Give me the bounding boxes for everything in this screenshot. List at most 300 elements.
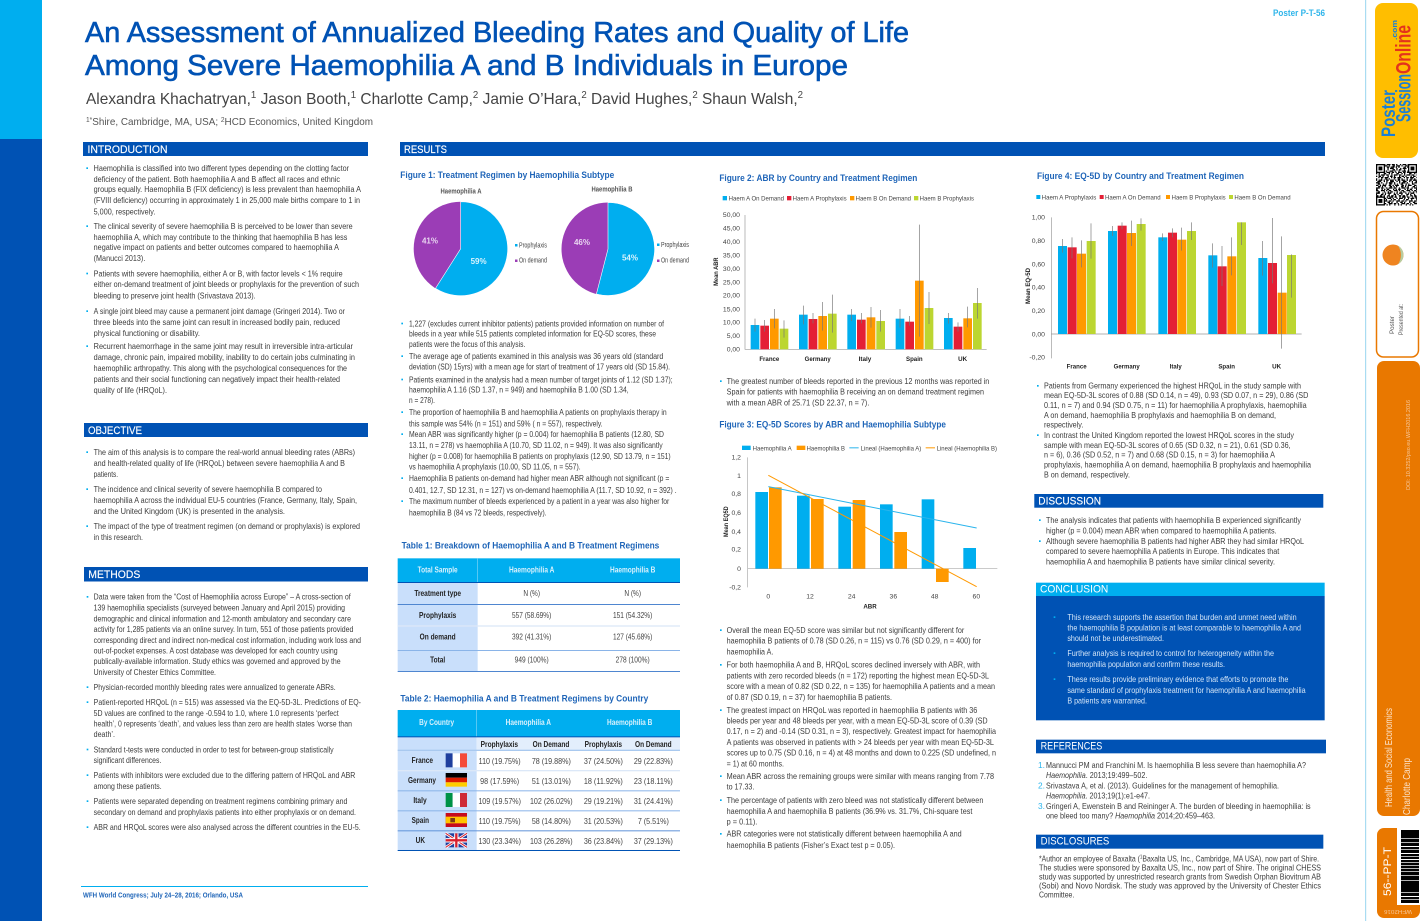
authors: Shaun Walsh, bbox=[698, 91, 798, 108]
text block: results bullets: haemophilia B (84 vs 72 bleeds, respectively). bbox=[409, 507, 547, 517]
figure 2: ABR bar chart bbox=[713, 173, 987, 363]
sidebar: orange topic tab: Charlotte Camp bbox=[1402, 758, 1413, 815]
y axis labels: -0,20 bbox=[1029, 355, 1045, 362]
heading: introduction bbox=[83, 142, 368, 156]
table 1: treatment regimens: 278 (100%) bbox=[616, 656, 650, 665]
text block: figure 3 notes: bleeds per year and 48 bleeds per year, with a mean EQ-5D-3L score of 0.39 (SD bbox=[727, 716, 988, 726]
table 2: regimens by country: Prophylaxis bbox=[585, 740, 622, 749]
table 2: regimens by country: On Demand bbox=[533, 740, 569, 749]
heading: methods bbox=[84, 567, 368, 582]
text block: figure 4 notes bbox=[1037, 381, 1311, 479]
x axis labels: 36 bbox=[890, 594, 897, 601]
table 2: regimens by country: Haemophilia B bbox=[607, 718, 653, 727]
y axis labels: 20,00 bbox=[723, 293, 740, 300]
text block: introduction bullets: patients and their social functioning can negatively impact their health-related bbox=[94, 374, 340, 384]
text block: figure 3 notes: The percentage of patients with zero bleed was not statistically different between bbox=[727, 795, 984, 805]
table 1: treatment regimens: Haemophilia A bbox=[509, 566, 555, 575]
y axis labels: 0,60 bbox=[1032, 261, 1045, 268]
text block: figure 3 notes: of 0.87 (SD 0.19, n = 37) for haemophilia B patients. bbox=[727, 692, 892, 702]
y axis labels: 30,00 bbox=[723, 266, 740, 273]
sidebar: orange topic tab bbox=[1377, 361, 1420, 816]
table 2: regimens by country: Prophylaxis bbox=[481, 740, 518, 749]
x axis title: ABR bbox=[863, 603, 877, 610]
text block: figure 4 notes: A on demand, haemophilia B prophylaxis and haemophilia B on demand, bbox=[1044, 410, 1276, 420]
legend bbox=[1036, 194, 1291, 201]
text block: figure 3 notes: For both haemophilia A and B, HRQoL scores declined inversely with ABR, with bbox=[727, 660, 980, 670]
y axis title: Mean EQ5D bbox=[723, 506, 730, 537]
legend: Haem B Prophylaxis bbox=[920, 195, 975, 202]
heading: disclosures: DISCLOSURES bbox=[1041, 836, 1109, 848]
text block: objective bullets: The incidence and clinical severity of severe haemophilia B compared to bbox=[94, 484, 322, 494]
panel: references: Srivastava A, et al. (2013). Guidelines for the management of hemophilia. bbox=[1046, 781, 1279, 791]
text block: figure 2 note: with a mean ABR of 25.71 (SD 22.37, n = 7). bbox=[726, 397, 869, 407]
text block: methods bullets: Physician-recorded monthly bleeding rates were annualized to generate ABRs. bbox=[94, 682, 336, 692]
text block: figure 3 notes: Mean ABR across the remaining groups were similar with means ranging from 7.78 bbox=[727, 771, 994, 781]
panel: references: 1. bbox=[1038, 760, 1045, 770]
pie chart: haemophilia A: 59% bbox=[471, 257, 487, 266]
poster number: Poster P-T-56 bbox=[1273, 8, 1325, 19]
text block: methods bullets bbox=[87, 592, 361, 832]
text block: objective bullets: in this research. bbox=[94, 532, 143, 542]
text block: results bullets: 13.11, n = 278) vs haemophilia A (10.70, SD 11.02, n = 949). It was also significantly bbox=[409, 440, 663, 450]
sidebar: poster session online logo: Poster bbox=[1379, 90, 1400, 137]
figure 2 title: Figure 2: ABR by Country and Treatment Regimen bbox=[719, 173, 918, 183]
panel: references: 3. bbox=[1038, 801, 1045, 811]
text block: results bullets: haemophilia A 1.16 (SD 1.37, n = 949) and haemophilia B 1.00 (SD 1.34, bbox=[409, 384, 629, 394]
text block: figure 4 notes: mean EQ-5D-3L scores of 0.88 (SD 0.14, n = 49), 0.93 (SD 0.07, n = 29), 0.86 (SD bbox=[1044, 390, 1308, 400]
y axis labels: 40,00 bbox=[723, 239, 740, 246]
legend: Haem B On Demand bbox=[1234, 194, 1291, 201]
table 2: regimens by country: 103 (26.28%) bbox=[530, 837, 573, 846]
panel: references: one bleed too many? Haemophilia 2014;20:459–463. bbox=[1046, 810, 1215, 820]
panel: conclusion: the haemophilia B population is at least comparable to haemophilia A and bbox=[1067, 622, 1301, 632]
figure 4: EQ-5D by country chart bbox=[1025, 171, 1302, 371]
heading: references: REFERENCES bbox=[1041, 741, 1102, 753]
figure 3 title: Figure 3: EQ-5D Scores by ABR and Haemophilia Subtype bbox=[719, 419, 946, 429]
table 2: regimens by country: 31 (20.53%) bbox=[584, 817, 623, 826]
sidebar: poster session online logo: Session bbox=[1392, 74, 1416, 122]
text block: methods bullets: 5D values are confined to the range -0.594 to 1.0, where 1.0 represents ‘perfect bbox=[94, 708, 339, 718]
panel: references bbox=[1036, 740, 1326, 820]
authors: 2 bbox=[581, 90, 587, 101]
table 2: regimens by country: Haemophilia A bbox=[506, 718, 551, 727]
text block: methods bullets: ABR and HRQoL scores were also analysed across the different countries in the EU-5. bbox=[94, 822, 361, 832]
panel: introduction bbox=[83, 142, 368, 395]
y axis labels: 0,20 bbox=[1032, 308, 1045, 315]
authors: 2 bbox=[473, 90, 479, 101]
x axis labels: 48 bbox=[931, 594, 939, 601]
table 2: regimens by country: 109 (19.57%) bbox=[478, 797, 521, 806]
legend: Haem B Prophylaxis bbox=[1172, 194, 1226, 201]
pie chart: haemophilia B: 46% bbox=[574, 238, 590, 247]
pie chart: haemophilia A: Haemophilia A bbox=[440, 188, 482, 196]
panel: conclusion: These results provide preliminary evidence that efforts to promote the bbox=[1067, 674, 1289, 684]
y axis labels bbox=[729, 455, 741, 592]
table 2: regimens by country: Italy bbox=[413, 796, 427, 805]
category labels: Italy bbox=[1170, 364, 1182, 371]
y axis labels: 0,40 bbox=[1032, 285, 1045, 292]
table 1: treatment regimens: N (%) bbox=[624, 589, 641, 598]
table 1 title: Table 1: Breakdown of Haemophilia A and B Treatment Regimens bbox=[402, 541, 659, 551]
table 2: regimens by country: 7 (5.51%) bbox=[638, 817, 669, 826]
y axis labels: 0,4 bbox=[731, 529, 741, 536]
y axis labels: 45,00 bbox=[723, 226, 740, 233]
text block: introduction bullets: physical functioning or disability. bbox=[94, 328, 200, 338]
text block: objective bullets: and health-related quality of life (HRQoL) between severe haemophilia A and B bbox=[94, 458, 345, 468]
text block: figure 4 notes: Patients from Germany experienced the highest HRQoL in the study sample with bbox=[1044, 381, 1301, 391]
affiliations: Shire, Cambridge, MA, USA; bbox=[92, 116, 221, 128]
legend: Haem A Prophylaxis bbox=[1042, 194, 1097, 201]
heading: results bbox=[400, 142, 1325, 156]
icon: flag Germany bbox=[446, 773, 467, 787]
bars bbox=[751, 281, 982, 349]
table 2: regimens by country: 29 (19.21%) bbox=[584, 797, 623, 806]
table 2: regimens by country: On Demand bbox=[635, 740, 672, 749]
category labels: UK bbox=[1272, 364, 1281, 371]
panel: methods bbox=[84, 567, 368, 832]
y axis title: Mean EQ-5D bbox=[1025, 268, 1032, 304]
text block: introduction bullets: 5,000, respectively. bbox=[94, 206, 155, 216]
category labels: France bbox=[1067, 364, 1087, 371]
table 1: treatment regimens: Treatment type bbox=[414, 589, 461, 598]
text block: methods bullets: among these patients. bbox=[94, 781, 162, 791]
sidebar: barcode tab bbox=[1377, 828, 1420, 918]
x axis labels: 12 bbox=[806, 594, 814, 601]
pie chart: haemophilia B: On demand bbox=[661, 258, 689, 264]
category labels bbox=[759, 356, 967, 363]
text block: discussion bullets: compared to severe haemophilia A patients in Europe. This indicates that bbox=[1046, 546, 1280, 556]
table 2: regimens by country: 58 (14.80%) bbox=[532, 817, 571, 826]
text block: figure 3 notes: = 1) at 60 months. bbox=[727, 758, 784, 768]
text block: figure 2 note: Spain for patients with haemophilia B receiving an on demand treatment regimen bbox=[727, 387, 984, 397]
text block: introduction bullets: groups equally. Haemophilia B (FIX deficiency) is less prevalent than haemophilia A bbox=[94, 184, 361, 194]
legend: Haem B On Demand bbox=[856, 195, 911, 202]
text block: introduction bullets: haemophilia A, which may contribute to the thinking that haemophilia B has less bbox=[94, 232, 347, 242]
table 1: treatment regimens: 127 (45.68%) bbox=[613, 633, 653, 642]
authors: 1 bbox=[351, 90, 357, 101]
panel: disclosures: *Author an employee of Baxalta ( bbox=[1039, 853, 1161, 863]
heading: conclusion bbox=[1036, 583, 1325, 596]
text block: results bullets: The maximum number of bleeds experienced by a patient in a year was also higher for bbox=[409, 496, 670, 506]
table 2: regimens by country: 37 (24.50%) bbox=[584, 757, 623, 766]
sidebar: poster session online logo: Online bbox=[1392, 25, 1416, 74]
figure 4 title: Figure 4: EQ-5D by Country and Treatment Regimen bbox=[1037, 171, 1244, 181]
y axis labels: 0,00 bbox=[1032, 331, 1045, 338]
table 2: regimens by country: 18 (11.92%) bbox=[584, 777, 623, 786]
text block: methods bullets: death’. bbox=[94, 729, 115, 739]
category labels: Germany bbox=[1114, 364, 1140, 371]
authors: Charlotte Camp, bbox=[356, 91, 473, 108]
table 2: regimens by country: Germany bbox=[408, 776, 436, 785]
legend bbox=[723, 195, 975, 202]
text block: figure 2 note bbox=[720, 376, 990, 407]
table 2: regimens by country: 36 (23.84%) bbox=[584, 837, 623, 846]
sidebar: orange topic tab: DOI: 10.3252/pso.eu.WFH2016.2016 bbox=[1406, 400, 1412, 490]
y axis labels: 10,00 bbox=[723, 320, 740, 327]
footer: congress: WFH World Congress; July 24–28, 2016; Orlando, USA bbox=[83, 891, 243, 900]
panel: disclosures: 1 bbox=[1140, 855, 1142, 861]
text block: objective bullets: patients. bbox=[94, 469, 118, 479]
table 2: regimens by country: 23 (18.11%) bbox=[634, 777, 673, 786]
sidebar: presented at box: Presented at: bbox=[1398, 304, 1405, 335]
text block: figure 3 notes: patients with zero recorded bleeds (n = 172) reporting the highest mean EQ-5D-3L bbox=[727, 670, 989, 680]
icon: congress logo bbox=[1382, 244, 1404, 266]
bars bbox=[1058, 222, 1296, 334]
text block: results bullets bbox=[401, 318, 677, 517]
text block: introduction bullets: bleeding to preserve joint health (Srivastava 2013). bbox=[94, 290, 256, 300]
category labels: Spain bbox=[1218, 364, 1235, 371]
y axis labels: 1,2 bbox=[731, 455, 741, 462]
sidebar: orange topic tab: Health and Social Economics bbox=[1384, 708, 1395, 807]
y axis labels: 5,00 bbox=[727, 333, 740, 340]
panel: objective bbox=[84, 423, 368, 542]
authors: 1 bbox=[251, 90, 257, 101]
figure 1 title: Figure 1: Treatment Regimen by Haemophilia Subtype bbox=[400, 170, 614, 180]
panel: conclusion: B patients are warranted. bbox=[1067, 695, 1147, 705]
text block: figure 3 notes: to 17.33. bbox=[727, 782, 754, 792]
sidebar: QR code bbox=[1376, 164, 1417, 206]
panel: disclosures: study was supported by unrestricted research grants from Swedish Orphan Biovitrum AB bbox=[1039, 871, 1321, 881]
panel: references: Haemophilia. 2013;19:499–502. bbox=[1046, 770, 1147, 780]
text block: results bullets: n = 278). bbox=[409, 395, 435, 405]
pie chart: haemophilia A: On demand bbox=[519, 258, 547, 264]
sidebar: barcode tab: WFH2016 bbox=[1384, 908, 1412, 914]
text block: figure 4 notes: respectively. bbox=[1044, 419, 1083, 429]
panel: references: Gringeri A, Ewenstein B and Reininger A. The burden of bleeding in haemophilia: is bbox=[1046, 801, 1311, 811]
y axis labels: 15,00 bbox=[723, 306, 740, 313]
heading: conclusion: CONCLUSION bbox=[1040, 584, 1108, 596]
sidebar: poster session online logo: .com bbox=[1392, 20, 1399, 40]
text block: introduction bullets: quality of life (HRQoL). bbox=[94, 385, 167, 395]
legend: Lineal (Haemophilia B) bbox=[937, 445, 997, 452]
text block: introduction bullets bbox=[86, 163, 361, 395]
figure 3: EQ-5D by ABR chart bbox=[719, 419, 997, 610]
authors: Jamie O’Hara, bbox=[478, 91, 581, 108]
text block: figure 3 notes bbox=[720, 625, 996, 850]
bars bbox=[755, 487, 976, 582]
table 1: treatment regimens bbox=[398, 541, 680, 672]
text block: introduction bullets: deficiency of the patient. Both haemophilia A and B affect all races and ethnic bbox=[94, 174, 340, 184]
table 2: regimens by country bbox=[398, 694, 680, 851]
text block: introduction bullets: damage, chronic pain, impaired mobility, inability to do certain jobs culminating in bbox=[94, 352, 355, 362]
text block: introduction bullets: either on-demand treatment of joint bleeds or prophylaxis for the prevention of such bbox=[94, 279, 359, 289]
text block: methods bullets: Patients were separated depending on treatment regimens combining primary and bbox=[94, 796, 348, 806]
text block: figure 4 notes: B on demand, respectively. bbox=[1044, 469, 1130, 479]
text block: results bullets: Mean ABR was significantly higher (p = 0.004) for haemophilia B patients (12.80, SD bbox=[409, 429, 664, 439]
text block: introduction bullets: Recurrent haemorrhage in the same joint may result in irreversible intra-articular bbox=[94, 341, 353, 351]
text block: figure 4 notes: sample with mean EQ-5D-3L scores of 0.65 (SD 0.32, n = 21), 0.61 (SD 0.36, bbox=[1044, 440, 1291, 450]
error bars bbox=[1062, 218, 1291, 349]
text block: objective bullets: The impact of the type of treatment regimen (on demand or prophylaxis) is explored bbox=[94, 521, 360, 531]
text block: methods bullets: 139 haemophilia specialists (surveyed between January and April 2015) providing bbox=[94, 602, 345, 612]
table 2: regimens by country: 31 (24.41%) bbox=[634, 797, 673, 806]
text block: discussion bullets: Although severe haemophilia B patients had higher ABR they had similar HRQoL bbox=[1046, 536, 1304, 546]
table 1: treatment regimens: 392 (41.31%) bbox=[512, 633, 552, 642]
y axis labels: 35,00 bbox=[723, 252, 740, 259]
legend: Haem A On Demand bbox=[729, 195, 784, 202]
affiliations: HCD Economics, United Kingdom bbox=[225, 116, 373, 128]
table 1: treatment regimens: N (%) bbox=[523, 589, 540, 598]
category labels: Germany bbox=[805, 356, 831, 363]
panel: disclosures: The studies were sponsored by Baxalta US, Inc., now part of Shire. The original CHESS bbox=[1039, 862, 1321, 872]
table 2: regimens by country: 130 (23.34%) bbox=[478, 837, 521, 846]
table 2: regimens by country: 110 (19.75%) bbox=[479, 757, 521, 766]
panel: disclosures bbox=[1036, 835, 1323, 899]
table 2: regimens by country: 110 (19.75%) bbox=[479, 817, 521, 826]
legend: Haem A Prophylaxis bbox=[793, 195, 847, 202]
pie chart: haemophilia B: 54% bbox=[622, 254, 638, 262]
x axis labels: 0 bbox=[766, 594, 770, 601]
table 2 title: Table 2: Haemophilia A and B Treatment Regimens by Country bbox=[400, 694, 648, 704]
icon: flag France bbox=[446, 753, 467, 767]
heading: disclosures bbox=[1036, 835, 1323, 849]
pie chart: haemophilia A: Prophylaxis bbox=[519, 242, 547, 250]
text block: discussion bullets: higher (p = 0.004) mean ABR when compared to haemophilia A patients. bbox=[1046, 525, 1277, 535]
sidebar: presented at box: Poster bbox=[1389, 315, 1396, 334]
table 1: treatment regimens: 557 (58.69%) bbox=[512, 611, 552, 620]
text block: figure 4 notes: In contrast the United Kingdom reported the lowest HRQoL scores in the study bbox=[1044, 430, 1295, 440]
text block: introduction bullets: Haemophilia is classified into two different types depending on the clotting factor bbox=[94, 163, 349, 173]
sidebar: barcode tab: 56--PP-T bbox=[1382, 847, 1394, 896]
y axis title: Mean ABR bbox=[713, 257, 720, 286]
table 1: treatment regimens: 949 (100%) bbox=[515, 656, 549, 665]
panel: conclusion: This research supports the assertion that burden and unmet need within bbox=[1067, 612, 1297, 622]
trend lines bbox=[768, 475, 977, 587]
sidebar: poster session online logo bbox=[1375, 3, 1418, 158]
text block: results bullets: deviation (SD) 15yrs) with a mean age for start of treatment of 17 years old (SD 15.84). bbox=[409, 362, 670, 372]
pie chart: haemophilia B: Haemophilia B bbox=[592, 186, 632, 194]
text block: figure 4 notes: 0.11, n = 7) and 0.94 (SD 0.75, n = 11) for haemophilia A prophylaxis, haemophilia bbox=[1044, 400, 1307, 410]
y axis labels bbox=[723, 212, 740, 354]
text block: results bullets: higher (p = 0.008) for haemophilia B patients on prophylaxis (12.90, SD 13.79, n = 151) bbox=[409, 451, 671, 461]
text block: results bullets: The proportion of haemophilia B and haemophilia A patients on prophylaxis therapy in bbox=[409, 407, 667, 417]
table 2: regimens by country: 98 (17.59%) bbox=[480, 777, 519, 786]
text block: figure 3 notes: score with a mean of 0.82 (SD 0.22, n = 135) for haemophilia A patients and a mean bbox=[727, 681, 995, 691]
error bars bbox=[755, 225, 977, 338]
authors: Jason Booth, bbox=[256, 91, 351, 108]
panel: disclosures: (Sobi) and Novo Nordisk. The study was approved by the University of Chester Ethics bbox=[1039, 880, 1321, 890]
panel: references: 2. bbox=[1038, 781, 1045, 791]
legend bbox=[742, 445, 997, 452]
y axis labels: 0,8 bbox=[731, 491, 741, 498]
text block: figure 3 notes: A patients was observed in patients with > 24 bleeds per year with mean EQ-5D-3L bbox=[727, 737, 994, 747]
text block: results bullets: Haemophilia B patients on-demand had higher mean ABR although not significant (p = bbox=[409, 473, 669, 483]
text block: methods bullets: Data were taken from the “Cost of Haemophilia across Europe” – A cross-section of bbox=[94, 592, 351, 602]
heading: discussion bbox=[1034, 494, 1323, 508]
panel: references: Mannucci PM and Franchini M. Is haemophilia B less severe than haemophilia A? bbox=[1046, 760, 1306, 770]
legend: Lineal (Haemophilia A) bbox=[861, 445, 921, 452]
text block: figure 3 notes: ABR categories were not statistically different between haemophilia A and bbox=[727, 829, 962, 839]
panel: conclusion: same standard of prophylaxis treatment for haemophilia A and haemophilia bbox=[1067, 685, 1306, 695]
text block: results bullets: bleeds in a year while 515 patients completed information for EQ-5D scores, these bbox=[409, 328, 656, 338]
table 1: treatment regimens: Total Sample bbox=[418, 566, 458, 575]
table 2: regimens by country: By Country bbox=[419, 718, 455, 727]
category labels: France bbox=[759, 356, 780, 363]
text block: introduction bullets: Patients with severe haemophilia, either A or B, with factor levels < 1% require bbox=[94, 268, 343, 278]
text block: discussion bullets: The analysis indicates that patients with haemophilia B experienced significantly bbox=[1046, 515, 1302, 525]
icon: flag Italy bbox=[446, 793, 467, 807]
table 2: regimens by country: 102 (26.02%) bbox=[530, 797, 573, 806]
heading: objective bbox=[84, 423, 368, 437]
table 2: regimens by country: France bbox=[412, 756, 433, 765]
text block: figure 4 notes: n = 6), 0.36 (SD 0.52, n = 7) and 0.68 (SD 0.15, n = 3) for haemophilia A bbox=[1044, 449, 1275, 459]
icon: flag UK bbox=[446, 833, 467, 847]
text block: figure 3 notes: p = 0.11). bbox=[727, 816, 757, 826]
legend: Haemophilia B bbox=[807, 445, 845, 452]
text block: figure 3 notes: haemophilia B patients of 0.78 (SD 0.26, n = 115) vs 0.76 (SD 0.29, n = 400) for bbox=[727, 636, 981, 646]
panel: discussion bbox=[1034, 494, 1323, 566]
sidebar: presented at box bbox=[1376, 212, 1418, 357]
y axis labels: 25,00 bbox=[723, 279, 740, 286]
text block: objective bullets bbox=[86, 447, 360, 542]
title: Among Severe Haemophilia A and B Individuals in Europe bbox=[85, 50, 848, 82]
table 2: regimens by country: 29 (22.83%) bbox=[634, 757, 673, 766]
authors: David Hughes, bbox=[587, 91, 692, 108]
text block: methods bullets: out-of-pocket expenses. A cost database was developed for each country using bbox=[94, 645, 338, 655]
y axis labels: 0,80 bbox=[1032, 238, 1045, 245]
x axis labels bbox=[766, 594, 980, 601]
text block: results bullets: The average age of patients examined in this analysis was 36 years old (standard bbox=[409, 351, 664, 361]
table 2: regimens by country: 37 (29.13%) bbox=[634, 837, 673, 846]
authors: Alexandra Khachatryan, bbox=[86, 91, 257, 108]
text block: methods bullets: activity for 1,285 patients via an online survey. In turn, 551 of those patients provided bbox=[94, 624, 354, 634]
table 2: regimens by country: UK bbox=[416, 836, 425, 845]
heading: methods: METHODS bbox=[88, 569, 140, 581]
category labels: Italy bbox=[859, 356, 872, 363]
table 1: treatment regimens: Haemophilia B bbox=[610, 566, 656, 575]
text block: results bullets: this sample was 54% (n = 151) and 59% ( n = 557), respectively. bbox=[409, 418, 603, 428]
heading: introduction: INTRODUCTION bbox=[88, 144, 168, 156]
panel: conclusion: should not be underestimated. bbox=[1067, 633, 1164, 643]
legend: Haem A On Demand bbox=[1105, 194, 1161, 201]
y axis labels bbox=[1029, 215, 1045, 362]
text block: figure 2 note: The greatest number of bleeds reported in the previous 12 months was reported in bbox=[727, 376, 990, 386]
authors: 2 bbox=[798, 90, 803, 101]
affiliations: 1* bbox=[86, 117, 92, 124]
y axis labels: 1 bbox=[737, 473, 741, 480]
affiliations: 2 bbox=[221, 117, 225, 124]
text block: methods bullets: Patients with inhibitors were excluded due to the differing pattern of HRQoL and ABR bbox=[94, 770, 355, 780]
panel: disclosures: Baxalta US, Inc., Cambridge, MA USA), now part of Shire. bbox=[1142, 853, 1319, 863]
text block: introduction bullets: (Manucci 2013). bbox=[94, 253, 145, 263]
text block: figure 3 notes: haemophilia B patients (Fisher’s Exact test p = 0.05). bbox=[727, 840, 895, 850]
panel: disclosures: Committee. bbox=[1039, 889, 1074, 899]
text block: introduction bullets: A single joint bleed may cause a permanent joint damage (Gringeri 2014). Two or bbox=[94, 306, 345, 316]
text block: introduction bullets: three bleeds into the same joint can result in increased bodily pain, reduced bbox=[94, 317, 340, 327]
text block: figure 3 notes: 0.17, n = 2) and -0.14 (SD 0.31, n = 3), respectively. Greatest impact for haemophilia bbox=[727, 726, 996, 736]
authors: 2 bbox=[692, 90, 698, 101]
text block: methods bullets: secondary on demand and prophylaxis patients into either prophylaxis or on demand. bbox=[94, 807, 356, 817]
icon: flag Spain bbox=[446, 813, 467, 827]
y axis labels: 0,6 bbox=[731, 510, 741, 517]
text block: methods bullets: health’, 0 represents ‘death’, and values less than zero are health states ‘worse than bbox=[94, 718, 352, 728]
text block: figure 3 notes: Overall the mean EQ-5D score was similar but not significantly different for bbox=[727, 625, 965, 635]
text block: discussion bullets bbox=[1039, 515, 1304, 566]
table 1: treatment regimens: Prophylaxis bbox=[419, 611, 457, 620]
text block: figure 3 notes: haemophilia A. bbox=[727, 647, 773, 657]
pie chart: haemophilia B: Prophylaxis bbox=[661, 242, 689, 249]
text block: results bullets: 1,227 (excludes current inhibitor patients) patients provided information on number of bbox=[409, 318, 665, 328]
title bbox=[85, 17, 909, 82]
text block: discussion bullets: haemophilia A and haemophilia B patients have similar clinical severity. bbox=[1046, 556, 1275, 566]
heading: results: RESULTS bbox=[404, 144, 447, 156]
figure 1: pie charts bbox=[400, 170, 689, 296]
x axis labels: 24 bbox=[848, 594, 856, 601]
pie chart: haemophilia A: 41% bbox=[422, 236, 438, 246]
panel: references: Haemophilia. 2013;19(1):e1-e47. bbox=[1046, 790, 1150, 800]
text block: methods bullets: corresponding direct and indirect non-medical cost information, including work loss and bbox=[94, 635, 361, 645]
text block: introduction bullets: (FVIII deficiency) occurring in approximately 1 in 25,000 male births compare to 1 in bbox=[94, 195, 360, 205]
